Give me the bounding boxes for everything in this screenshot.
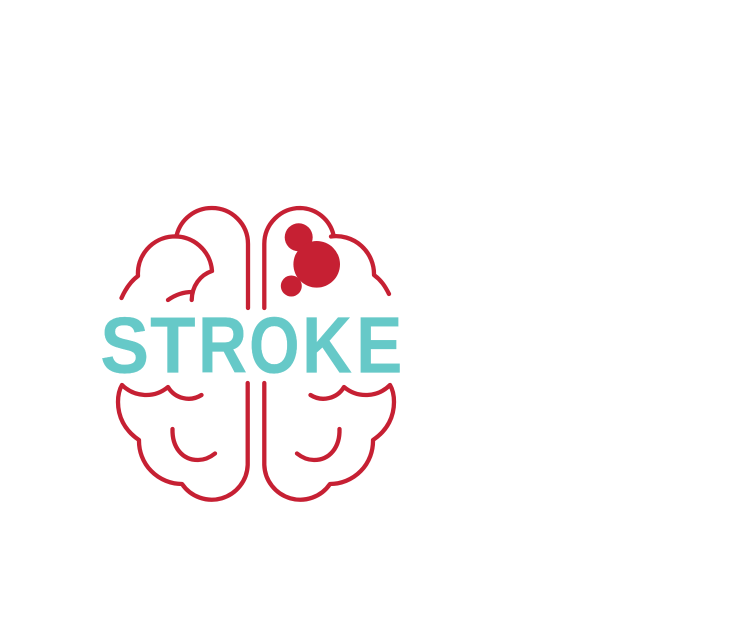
- title: STROKE: O: [249, 301, 300, 390]
- icon: brain outline: [118, 208, 394, 500]
- left hemisphere, lower: [118, 383, 248, 500]
- right hemisphere, upper: [264, 208, 389, 308]
- title: STROKE: R: [198, 300, 247, 390]
- title: STROKE: [100, 300, 402, 390]
- title: STROKE: S: [100, 302, 149, 390]
- title: STROKE: T: [150, 301, 196, 390]
- left hemisphere, upper: [122, 208, 248, 308]
- title: STROKE: K: [302, 300, 352, 390]
- icon: blood clot circles: [281, 223, 340, 296]
- right hemisphere, lower: [264, 383, 394, 500]
- title: STROKE: E: [356, 300, 402, 390]
